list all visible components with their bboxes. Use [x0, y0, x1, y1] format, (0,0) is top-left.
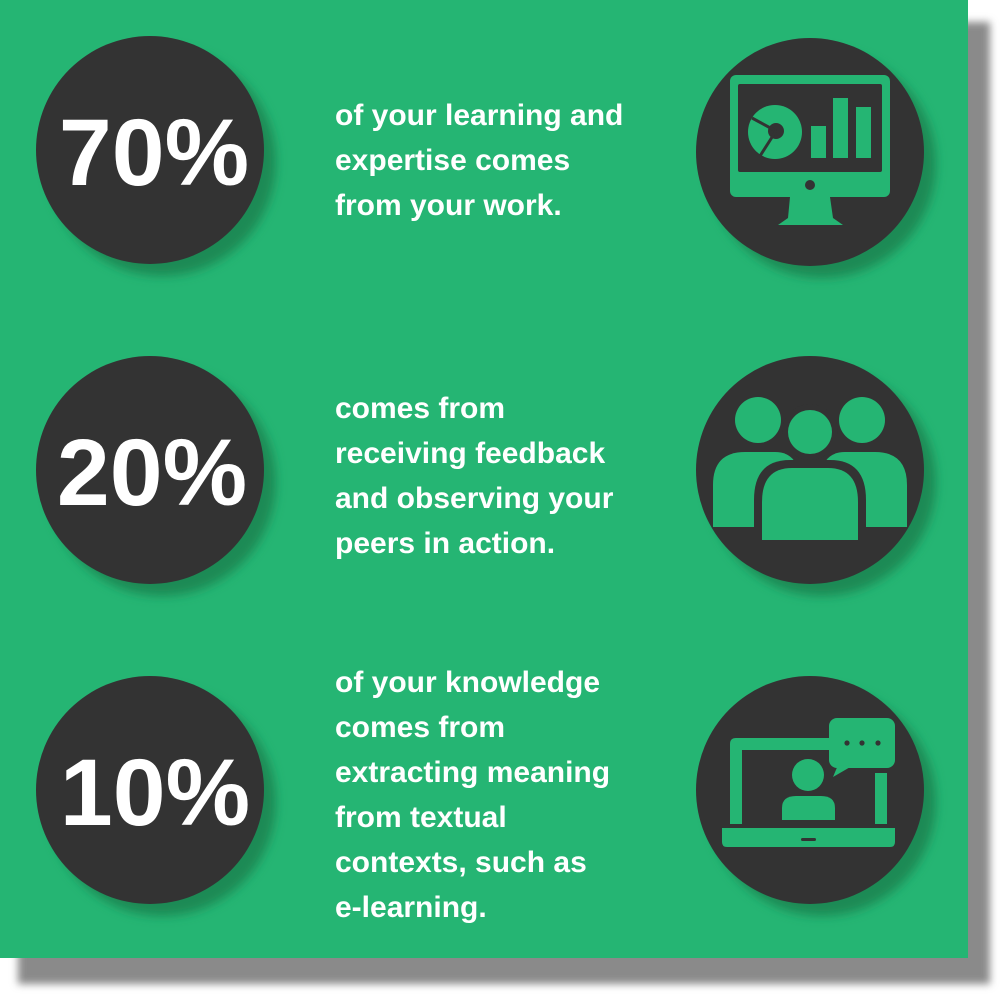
circle: 10%: 10%	[60, 740, 250, 846]
text: 10% description: e-learning.	[335, 891, 487, 924]
circle: 20%: 20%	[57, 420, 247, 526]
text: 10% description: extracting meaning	[335, 756, 610, 789]
text: 20% description	[335, 392, 613, 560]
icon: laptop with video call	[696, 676, 936, 916]
text: 70% description: of your learning and	[335, 99, 623, 132]
circle: 10%	[36, 676, 276, 916]
text: 20% description: comes from	[335, 392, 505, 425]
text: 10% description: of your knowledge	[335, 666, 600, 699]
icon: monitor with charts	[696, 38, 936, 278]
text: 10% description	[335, 666, 610, 924]
circle: 20%	[36, 356, 276, 596]
text: 20% description: and observing your	[335, 482, 613, 515]
text: 10% description: comes from	[335, 711, 505, 744]
circle: 70%	[36, 36, 276, 276]
text: 70% description: from your work.	[335, 189, 562, 222]
text: 70% description	[335, 99, 623, 222]
text: 10% description: from textual	[335, 801, 507, 834]
icon: people group	[696, 356, 936, 596]
text: 20% description: peers in action.	[335, 527, 555, 560]
text: 20% description: receiving feedback	[335, 437, 605, 470]
circle: 70%: 70%	[59, 100, 249, 206]
text: 70% description: expertise comes	[335, 144, 570, 177]
text: 10% description: contexts, such as	[335, 846, 587, 879]
